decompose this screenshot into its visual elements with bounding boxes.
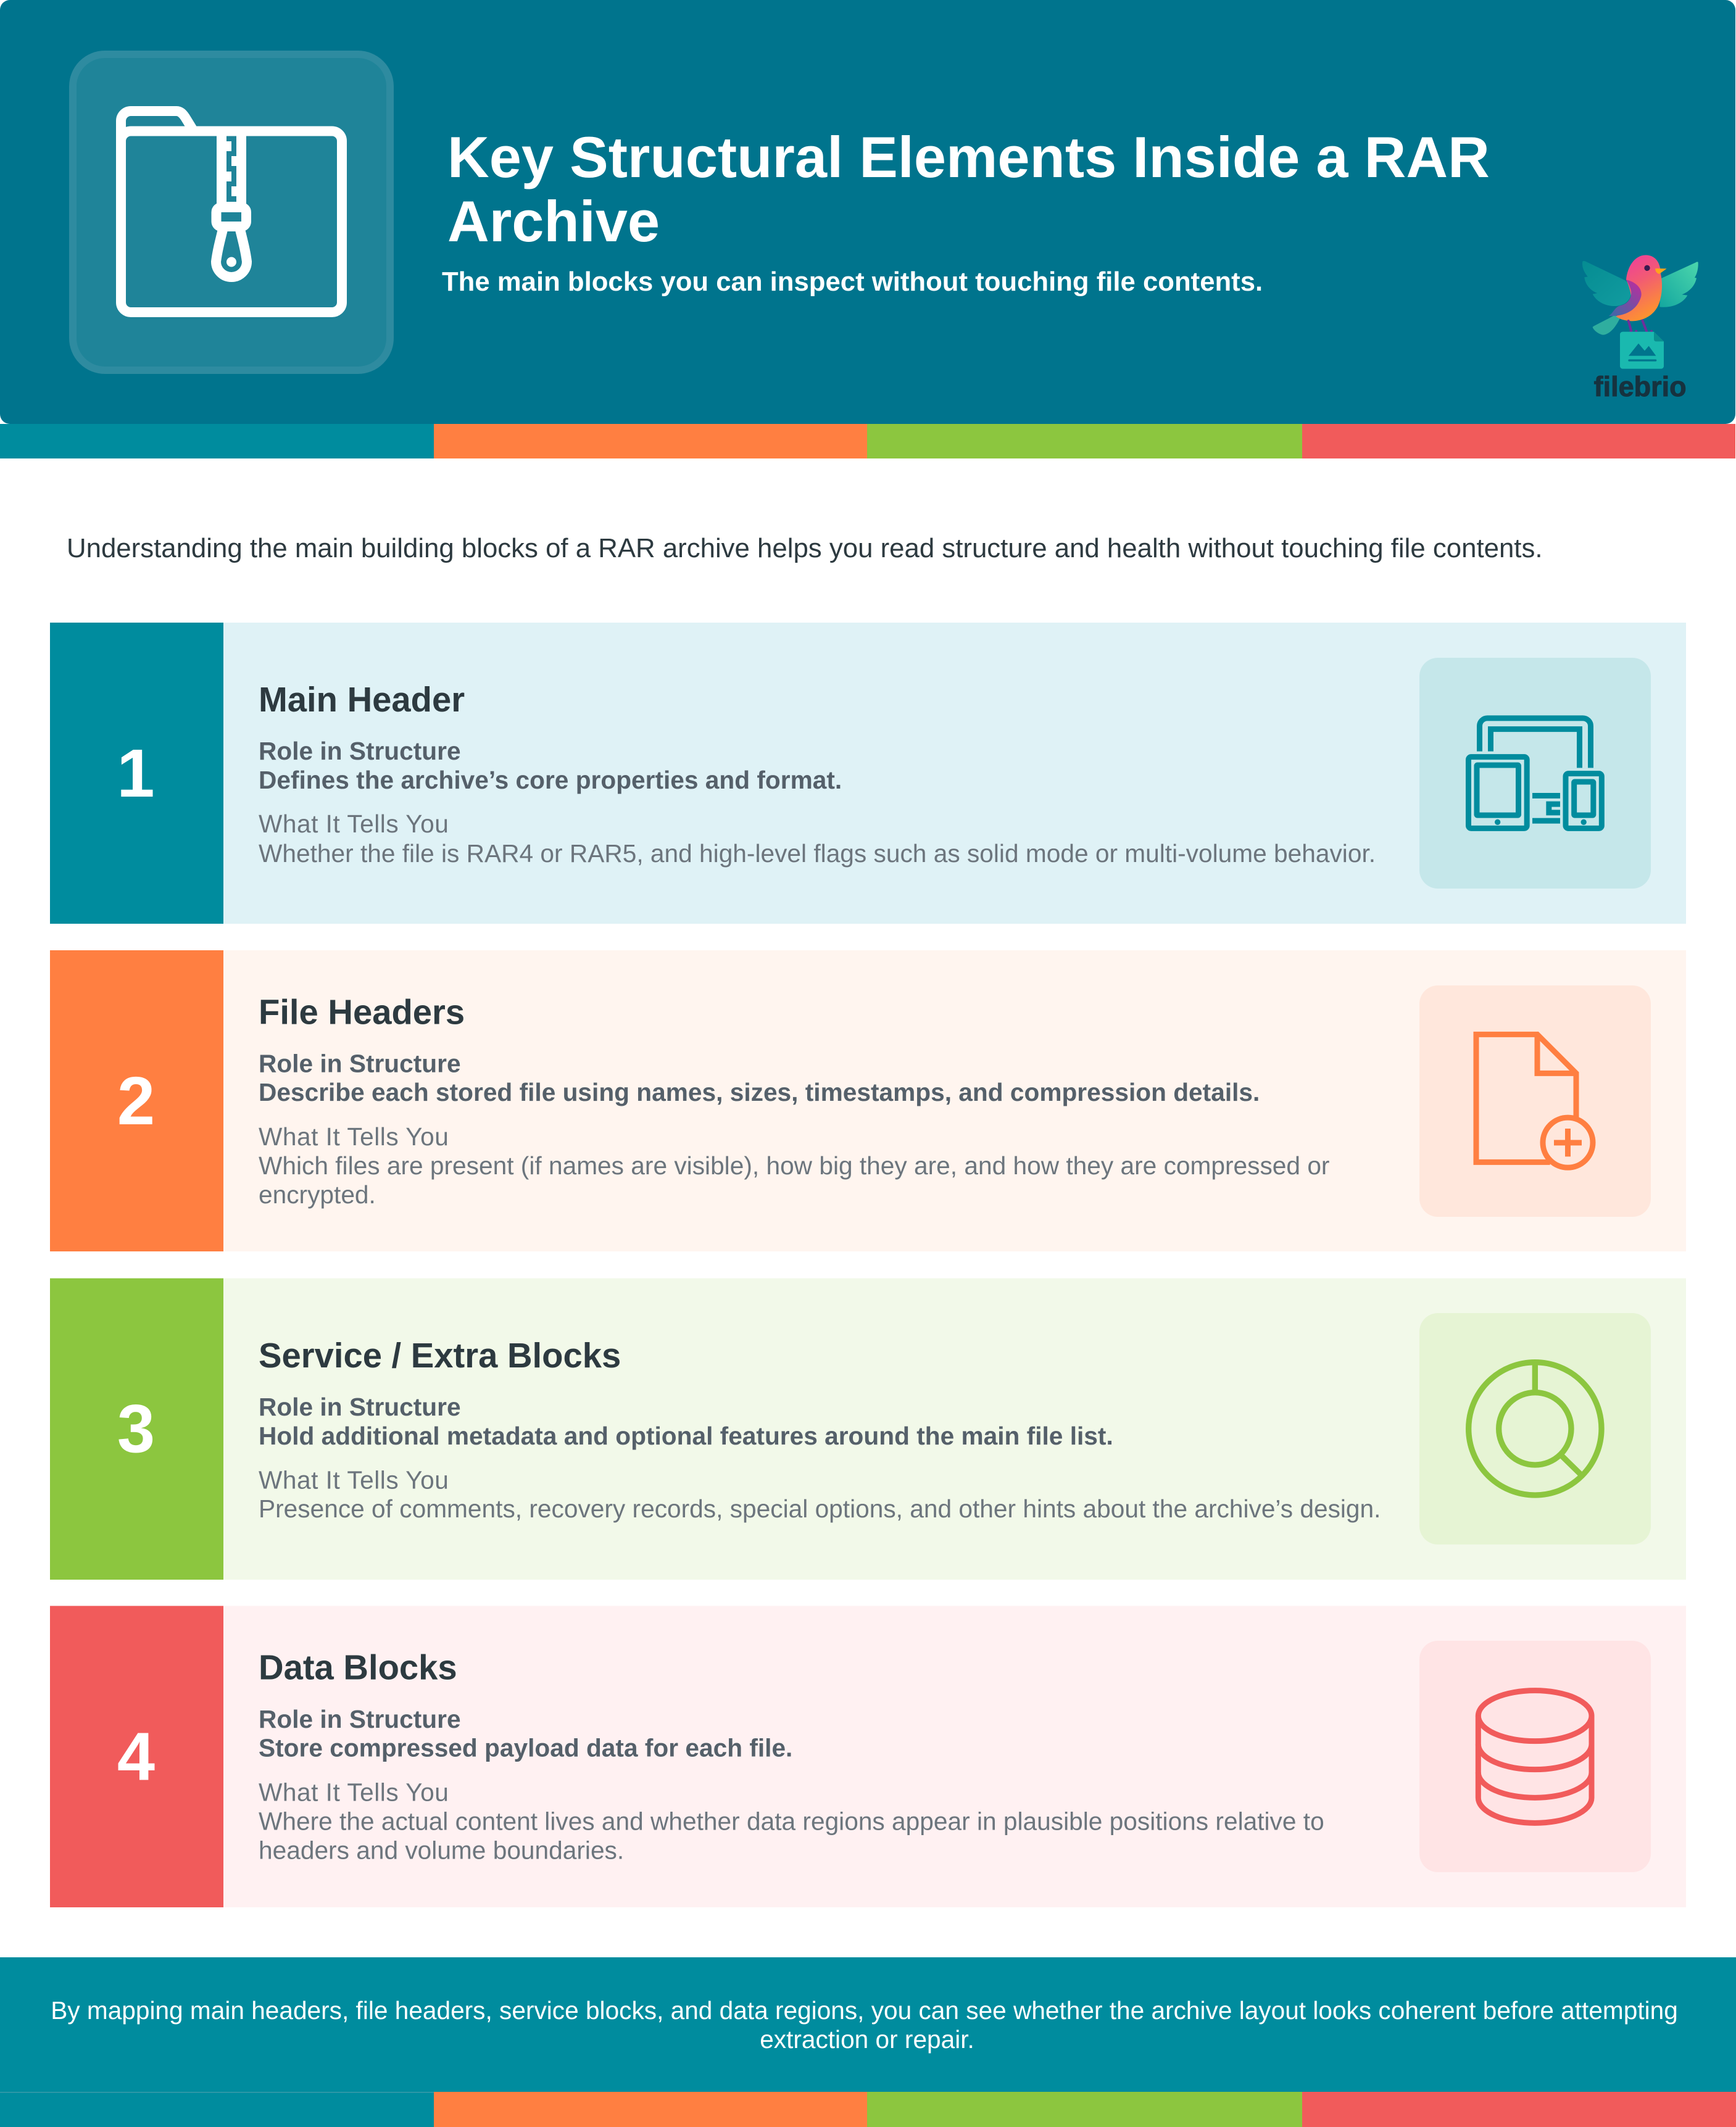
role in structure: Role in Structure (259, 1705, 461, 1733)
what it tells you: What It Tells You (259, 1778, 449, 1806)
role in structure (259, 1393, 1113, 1450)
number block 2: 2 (117, 1063, 155, 1139)
icon: zipped folder tile (73, 54, 390, 370)
number block 1 (50, 623, 223, 924)
what it tells you: What It Tells You (259, 1122, 449, 1151)
role in structure: Role in Structure (259, 737, 461, 765)
number block 4 (50, 1606, 223, 1907)
role in structure: Defines the archive’s core properties and format. (259, 766, 842, 794)
panel: 4 Data Blocks (50, 1606, 1686, 1907)
subtitle: The main blocks you can inspect without touching file contents. (442, 267, 1263, 297)
panel: 3 Service / Extra Blocks (50, 1279, 1686, 1580)
role in structure: Store compressed payload data for each file. (259, 1734, 792, 1762)
number block 1: 1 (117, 736, 155, 811)
heading: File Headers: File Headers (259, 992, 465, 1032)
logo: filebrio bird (1582, 255, 1698, 402)
number block 4: 4 (117, 1719, 155, 1794)
panel: 1 Main Header (50, 623, 1686, 924)
title (447, 125, 1490, 254)
role in structure: Describe each stored file using names, sizes, timestamps, and compression details. (259, 1078, 1260, 1106)
footer note: By mapping main headers, file headers, service blocks, and data regions, you can see whether the archive layout looks coherent before attempting (51, 1996, 1678, 2025)
footer note: extraction or repair. (760, 2025, 974, 2054)
icon: database (1419, 1641, 1651, 1872)
what it tells you (259, 1466, 1381, 1523)
number block 2 (50, 950, 223, 1251)
bottom colour strip (0, 2092, 1736, 2127)
role in structure: Role in Structure (259, 1050, 461, 1078)
what it tells you (259, 1778, 1324, 1865)
role in structure (259, 1705, 792, 1762)
what it tells you: Whether the file is RAR4 or RAR5, and high-level flags such as solid mode or multi-volume behavior. (259, 839, 1376, 868)
intro text: Understanding the main building blocks of a RAR archive helps you read structure and health without touching file contents. (67, 533, 1543, 563)
icon: file with plus (1419, 985, 1651, 1217)
role in structure (259, 737, 842, 794)
heading: Main Header: Main Header (259, 680, 465, 719)
icon: donut magnifier (1419, 1313, 1651, 1544)
top colour strip (0, 424, 1735, 458)
what it tells you: What It Tells You (259, 810, 449, 838)
logo: filebrio bird: filebrio (1594, 371, 1687, 402)
what it tells you: Presence of comments, recovery records, special options, and other hints about the archive’s design. (259, 1495, 1381, 1523)
panel: 2 File Headers (50, 950, 1686, 1251)
role in structure: Hold additional metadata and optional features around the main file list. (259, 1422, 1113, 1450)
what it tells you: headers and volume boundaries. (259, 1836, 624, 1865)
number block 3 (50, 1279, 223, 1580)
heading: Data Blocks: Data Blocks (259, 1648, 457, 1687)
title: Key Structural Elements Inside a RAR (447, 125, 1490, 189)
title: Archive (447, 189, 660, 254)
number block 3: 3 (117, 1391, 155, 1467)
role in structure: Role in Structure (259, 1393, 461, 1421)
what it tells you: encrypted. (259, 1180, 376, 1209)
heading: Service / Extra Blocks: Service / Extra Blocks (259, 1336, 621, 1375)
what it tells you: What It Tells You (259, 1466, 449, 1495)
what it tells you (259, 810, 1376, 868)
header banner (0, 0, 1735, 424)
what it tells you (259, 1122, 1329, 1209)
footer note (0, 1957, 1736, 2092)
what it tells you: Where the actual content lives and whether data regions appear in plausible positions relative to (259, 1807, 1324, 1836)
icon: devices (1419, 658, 1651, 889)
what it tells you: Which files are present (if names are visible), how big they are, and how they are compressed or (259, 1151, 1329, 1180)
role in structure (259, 1050, 1260, 1106)
